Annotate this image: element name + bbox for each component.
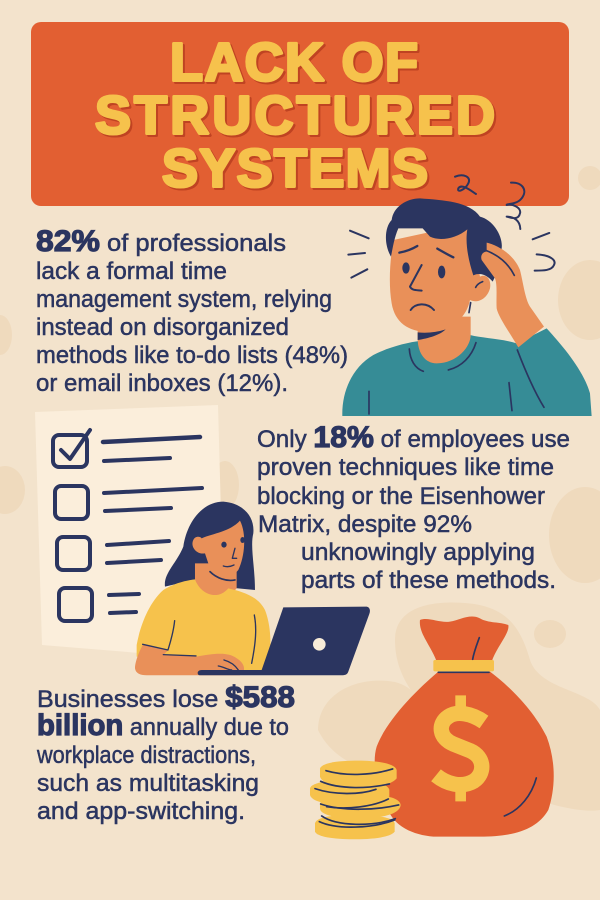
title: STRUCTURED [97,88,497,148]
text block: 82 percent: or email inboxes (12%). [36,370,288,397]
text block: 588 billion: Businesses lose $588 [37,681,295,714]
bag [420,617,508,662]
title: STRUCTURED [95,86,495,146]
text block: 18 percent: parts of these methods. [301,567,556,594]
hair [165,502,255,590]
text block: 588 billion [36,681,295,825]
text block: 82 percent: 82% of professionals [36,225,286,258]
hair [386,198,502,282]
title [95,32,497,201]
shirt [342,328,592,416]
neck [418,317,471,363]
title: LACK OF [170,32,418,92]
text block: 18 percent: Only 18% of employees use [257,421,570,454]
facial features [399,246,483,313]
text block: 588 billion: billion annually due to [37,709,289,742]
arm and hand [481,243,544,347]
empty boxes [55,486,202,621]
text block: 18 percent [257,421,570,594]
title: LACK OF [172,35,420,95]
icon: money bag [310,617,554,839]
text block: 18 percent: blocking or the Eisenhower [257,483,545,510]
neck [195,563,237,597]
text block: 18 percent: Matrix, despite 92% [258,511,472,538]
checklist panel [35,405,225,660]
bag tie [433,660,494,671]
title: SYSTEMS [162,138,428,198]
laptop [198,607,370,675]
coin stack [310,761,401,839]
checked box [53,430,200,467]
text block: 82 percent: instead on disorganized [36,314,289,341]
text block: 82 percent [36,225,348,397]
text block: 18 percent: proven techniques like time [257,454,554,481]
neck shadow [418,329,446,340]
arm [135,644,244,675]
text block: 18 percent: unknowingly applying [301,539,535,566]
text block: 588 billion: workplace distractions, [36,742,256,769]
text block: 588 billion: and app-switching. [37,798,245,825]
features and folds [143,548,256,670]
icon: confused man [342,175,592,416]
face [192,521,244,577]
face [390,223,490,332]
text block: 82 percent: management system, relying [36,286,332,313]
confusion marks [348,175,555,278]
text block: 82 percent: lack a formal time [36,258,227,285]
title banner [31,22,569,206]
text block: 588 billion: such as multitasking [37,770,259,797]
icon: woman with laptop [135,502,370,675]
shirt [137,579,270,670]
title: SYSTEMS [164,141,430,201]
text block: 82 percent: methods like to-do lists (48%) [36,342,348,369]
dollar sign [436,695,484,801]
